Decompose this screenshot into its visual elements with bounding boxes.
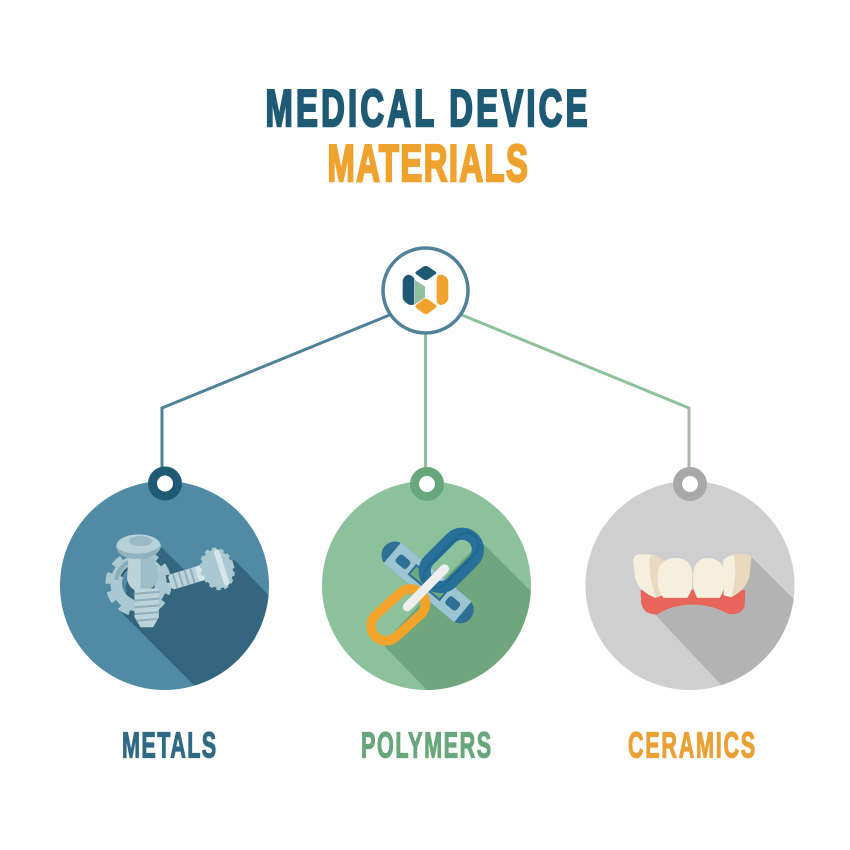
- infographic canvas: [60, 88, 794, 758]
- label: polymers: POLYMERS: [361, 726, 491, 766]
- ring: ceramics: [678, 472, 702, 496]
- panel: ceramics: [586, 467, 794, 690]
- icon: gear and screws: [109, 534, 238, 627]
- long shadow: ceramics: [655, 558, 794, 685]
- panel: metals: [60, 466, 269, 690]
- icon: teeth: [633, 554, 751, 614]
- connector: hub to ceramics: [462, 315, 689, 468]
- connector: hub to metals: [162, 314, 392, 468]
- connector: hub to polymers: [424, 334, 427, 468]
- icon: chain links: [365, 525, 486, 647]
- long shadow: metals: [120, 548, 268, 686]
- ring: polymers: [414, 472, 440, 496]
- title: [266, 80, 587, 193]
- label: ceramics: CERAMICS: [628, 726, 755, 766]
- panel: polymers: [322, 467, 531, 690]
- title: MEDICAL DEVICE: [266, 80, 587, 138]
- label: metals: METALS: [122, 726, 216, 766]
- hub icon: [383, 248, 468, 333]
- long shadow: polymers: [384, 544, 531, 690]
- ring: metals: [152, 471, 178, 496]
- title: MATERIALS: [328, 135, 528, 193]
